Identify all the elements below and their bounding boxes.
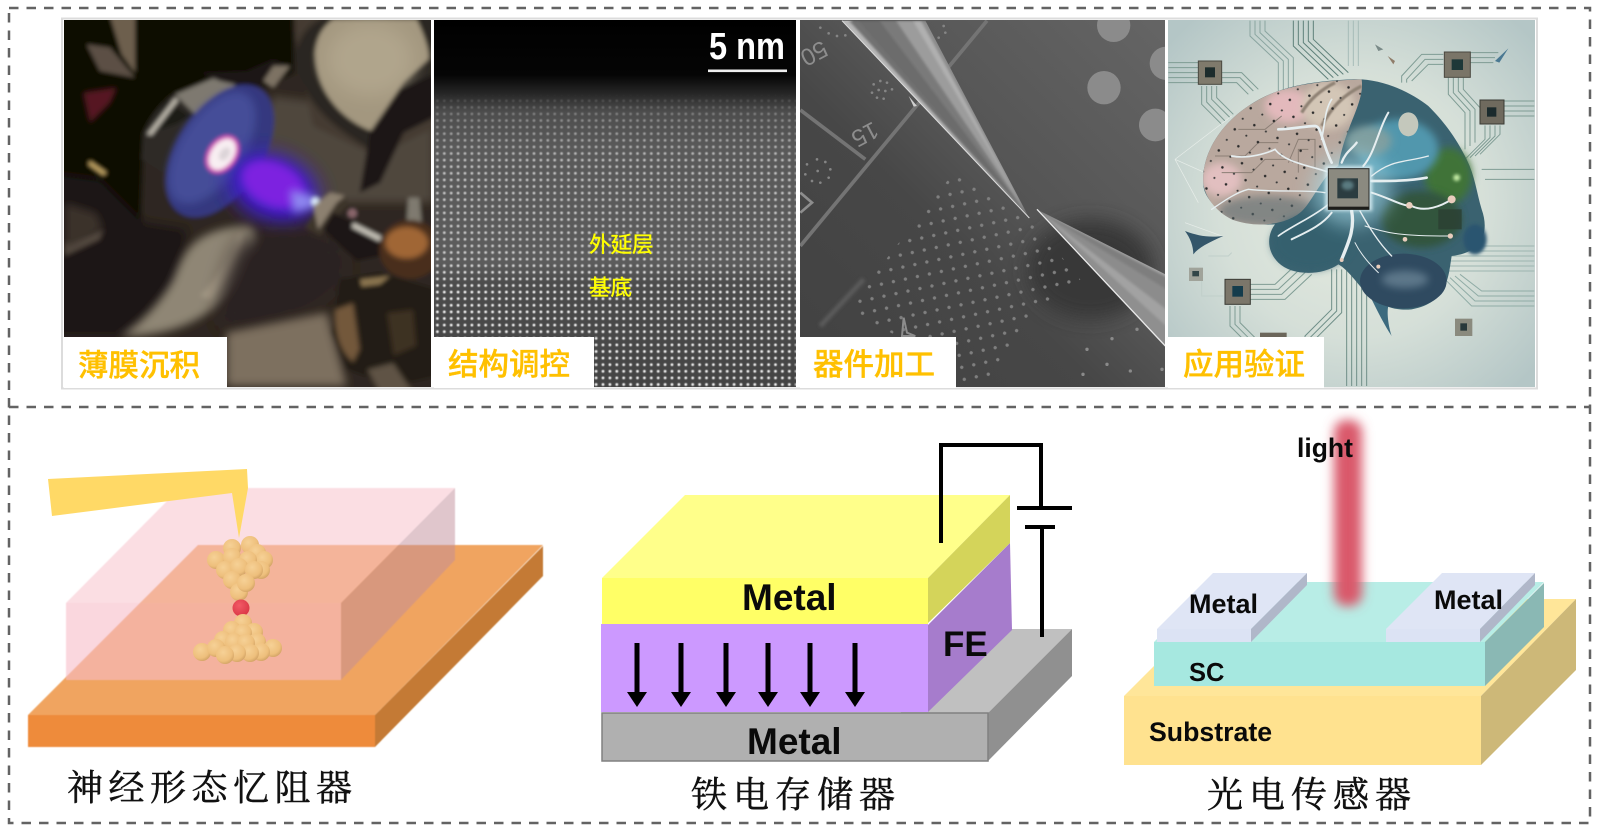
small wings <box>1185 231 1223 254</box>
label box: thin film deposition: 薄膜沉积 <box>78 349 200 383</box>
label box: device fabrication: 器件加工 <box>813 348 935 382</box>
label: FE: FE <box>943 625 988 664</box>
panel: thin film deposition photo <box>64 20 431 387</box>
device: ferroelectric memory <box>601 445 1072 815</box>
red atom <box>232 600 250 616</box>
panel: SEM device probe image: 15 <box>847 116 883 152</box>
caption: photodetector: 光电传感器 <box>1207 775 1417 815</box>
neural branches <box>1212 99 1452 273</box>
device: photodetector <box>1124 420 1576 815</box>
central chip <box>1325 166 1372 211</box>
label: epitaxial layer: 外延层 <box>589 233 654 257</box>
label box: application validation: 应用验证 <box>1183 348 1305 382</box>
label: left metal: Metal <box>1189 589 1258 619</box>
label: bottom metal: Metal <box>747 721 842 762</box>
chips <box>1189 52 1504 338</box>
caption: memristor: 神经形态忆阻器 <box>67 768 358 808</box>
ferroelectric layer <box>601 543 1012 712</box>
left metal electrode <box>1157 573 1307 642</box>
scale bar 5 nm <box>708 33 787 72</box>
process image strip <box>47 3 1542 406</box>
substrate block <box>1124 599 1576 765</box>
label: top metal: Metal <box>742 577 837 618</box>
label box: structure control: 结构调控 <box>448 348 570 382</box>
device: neuromorphic memristor <box>28 469 543 808</box>
caption: ferroelectric memory: 铁电存储器 <box>691 775 901 815</box>
label: substrate: Substrate <box>1149 717 1272 747</box>
panel: SEM device probe image <box>796 9 1183 393</box>
label box: device fabrication <box>800 337 956 388</box>
label: substrate: 基底 <box>589 276 632 300</box>
bottom metal layer <box>602 629 1072 761</box>
yellow AFM tip <box>48 469 248 538</box>
panel: neuromorphic brain illustration <box>1165 16 1542 393</box>
right metal electrode <box>1386 573 1535 642</box>
semiconductor layer <box>1154 582 1544 686</box>
label box: structure control <box>434 337 594 388</box>
top metal layer <box>602 495 1010 624</box>
lower filament cluster <box>193 614 282 664</box>
polarization arrows <box>627 643 865 707</box>
circuit traces <box>1168 21 1534 386</box>
label: SC: SC <box>1189 659 1224 687</box>
red light beam <box>1334 420 1362 606</box>
brain body <box>1203 79 1485 310</box>
panel: STEM lattice image <box>434 20 796 387</box>
label: right metal: Metal <box>1434 585 1503 615</box>
translucent pink switching layer <box>66 488 455 680</box>
battery circuit <box>941 445 1072 637</box>
panel: SEM device probe image: 50 <box>796 35 832 71</box>
label box: application validation <box>1168 337 1324 388</box>
label: light: light <box>1297 433 1353 463</box>
orange substrate slab <box>28 545 543 747</box>
scale bar 5 nm: 5 nm <box>709 26 785 68</box>
upper filament cluster <box>207 536 273 601</box>
label box: thin film deposition <box>64 337 227 388</box>
